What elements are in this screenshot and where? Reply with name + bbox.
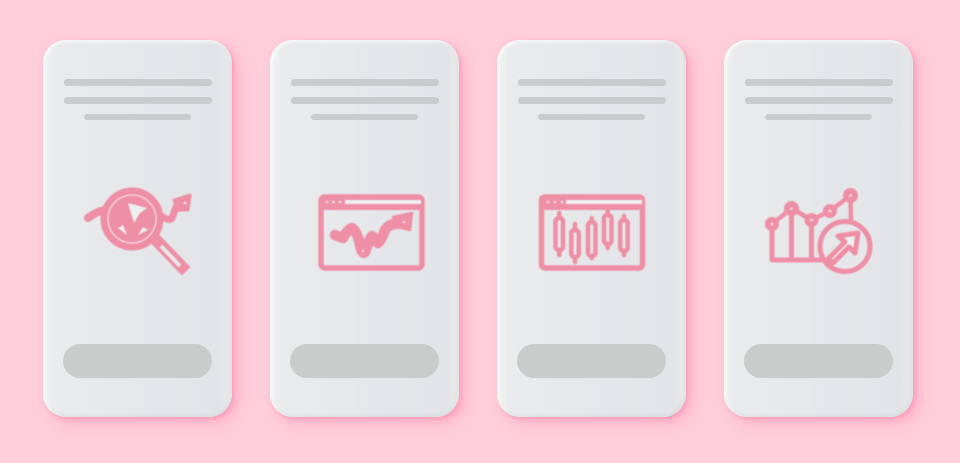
panel: card 3 [497,40,686,417]
panel: card 1 [43,40,232,417]
icon: browser window with candlestick chart [539,195,645,268]
panel: card 4 [724,40,912,417]
icon: browser window with line chart [319,195,424,268]
icon: bar chart with growth arrow badge [765,188,870,272]
panel: card 2 [270,40,458,417]
icon: magnifier over globe with rising arrow [88,189,190,267]
